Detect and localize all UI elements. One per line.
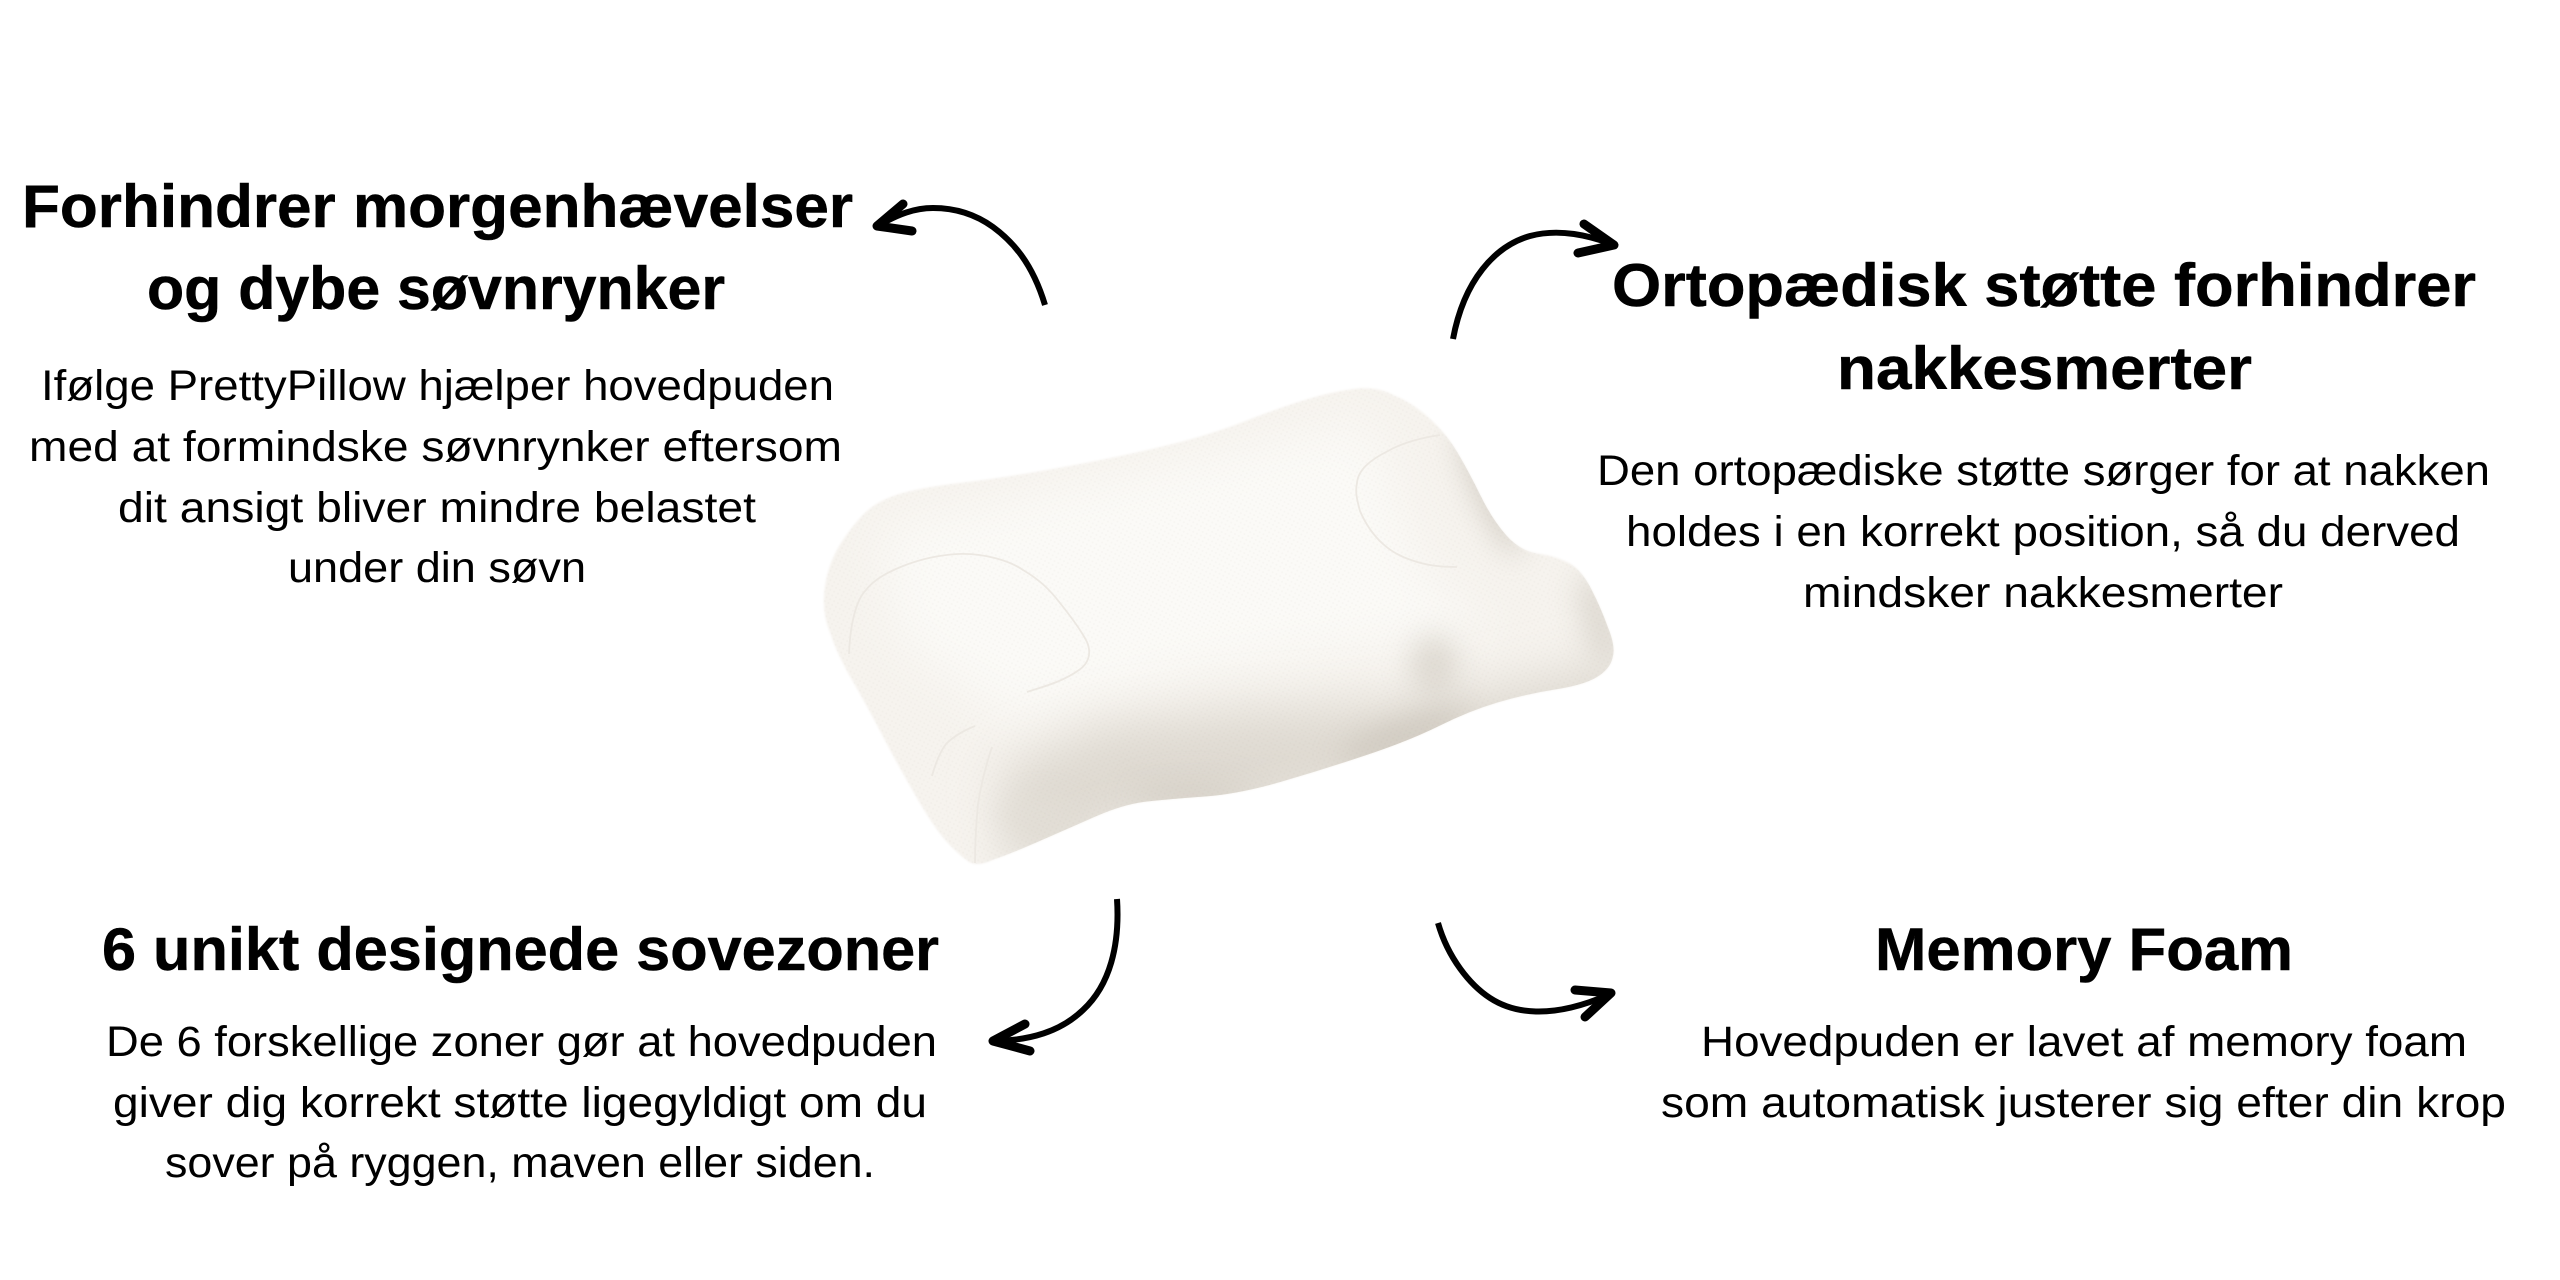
infographic canvas: [26, 182, 2504, 1186]
front notch seam: [932, 726, 975, 776]
text block: sleep zones description: De 6 forskellige zoner gør at hovedpuden: [106, 1018, 937, 1066]
heading: orthopedic support: [1612, 252, 2476, 402]
arrow: to morning swelling: [877, 204, 1045, 305]
heading: morning swelling: [22, 173, 853, 322]
text block: sleep zones description: giver dig korrekt støtte ligegyldigt om du: [113, 1079, 927, 1127]
front corner seam: [975, 747, 992, 863]
text block: orthopedic support description: Den ortopædiske støtte sørger for at nakken: [1597, 447, 2490, 495]
text block: morning swelling description: med at formindske søvnrynker eftersom: [29, 423, 842, 471]
heading: morning swelling: Forhindrer morgenhævelser: [22, 173, 853, 240]
heading: memory foam: Memory Foam: [1875, 916, 2293, 983]
text block: orthopedic support description: holdes i en korrekt position, så du derved: [1626, 508, 2460, 556]
heading: orthopedic support: Ortopædisk støtte forhindrer: [1612, 252, 2476, 319]
arrow: to orthopedic support: [1453, 224, 1614, 339]
text block: morning swelling description: [29, 362, 842, 592]
text block: memory foam description: Hovedpuden er lavet af memory foam: [1701, 1018, 2467, 1066]
heading: sleep zones: 6 unikt designede sovezoner: [102, 916, 939, 983]
panel: orthopedic support: [1597, 252, 2490, 617]
heading: morning swelling: og dybe søvnrynker: [147, 255, 725, 322]
image: white contour pillow: [820, 385, 1640, 880]
panel: morning swelling: [22, 173, 853, 592]
heading: orthopedic support: nakkesmerter: [1837, 335, 2252, 402]
panel: sleep zones: [102, 916, 939, 1187]
pillow shading: [923, 434, 1614, 861]
text block: sleep zones description: sover på ryggen, maven eller siden.: [165, 1139, 875, 1187]
text block: sleep zones description: [106, 1018, 937, 1187]
text block: orthopedic support description: [1597, 447, 2490, 617]
panel: memory foam: [1661, 916, 2506, 1127]
pillow body: [824, 388, 1614, 864]
text block: morning swelling description: under din søvn: [288, 544, 586, 592]
text block: memory foam description: [1661, 1018, 2506, 1127]
arrow: to sleep zones: [993, 899, 1118, 1051]
text block: memory foam description: som automatisk justerer sig efter din krop: [1661, 1079, 2506, 1127]
left head panel seam: [849, 554, 1089, 692]
arrow: to memory foam: [1438, 923, 1611, 1017]
text block: morning swelling description: dit ansigt bliver mindre belastet: [118, 484, 756, 532]
text block: morning swelling description: Ifølge PrettyPillow hjælper hovedpuden: [41, 362, 834, 410]
right head panel seam: [1356, 435, 1457, 567]
text block: orthopedic support description: mindsker nakkesmerter: [1803, 569, 2283, 617]
